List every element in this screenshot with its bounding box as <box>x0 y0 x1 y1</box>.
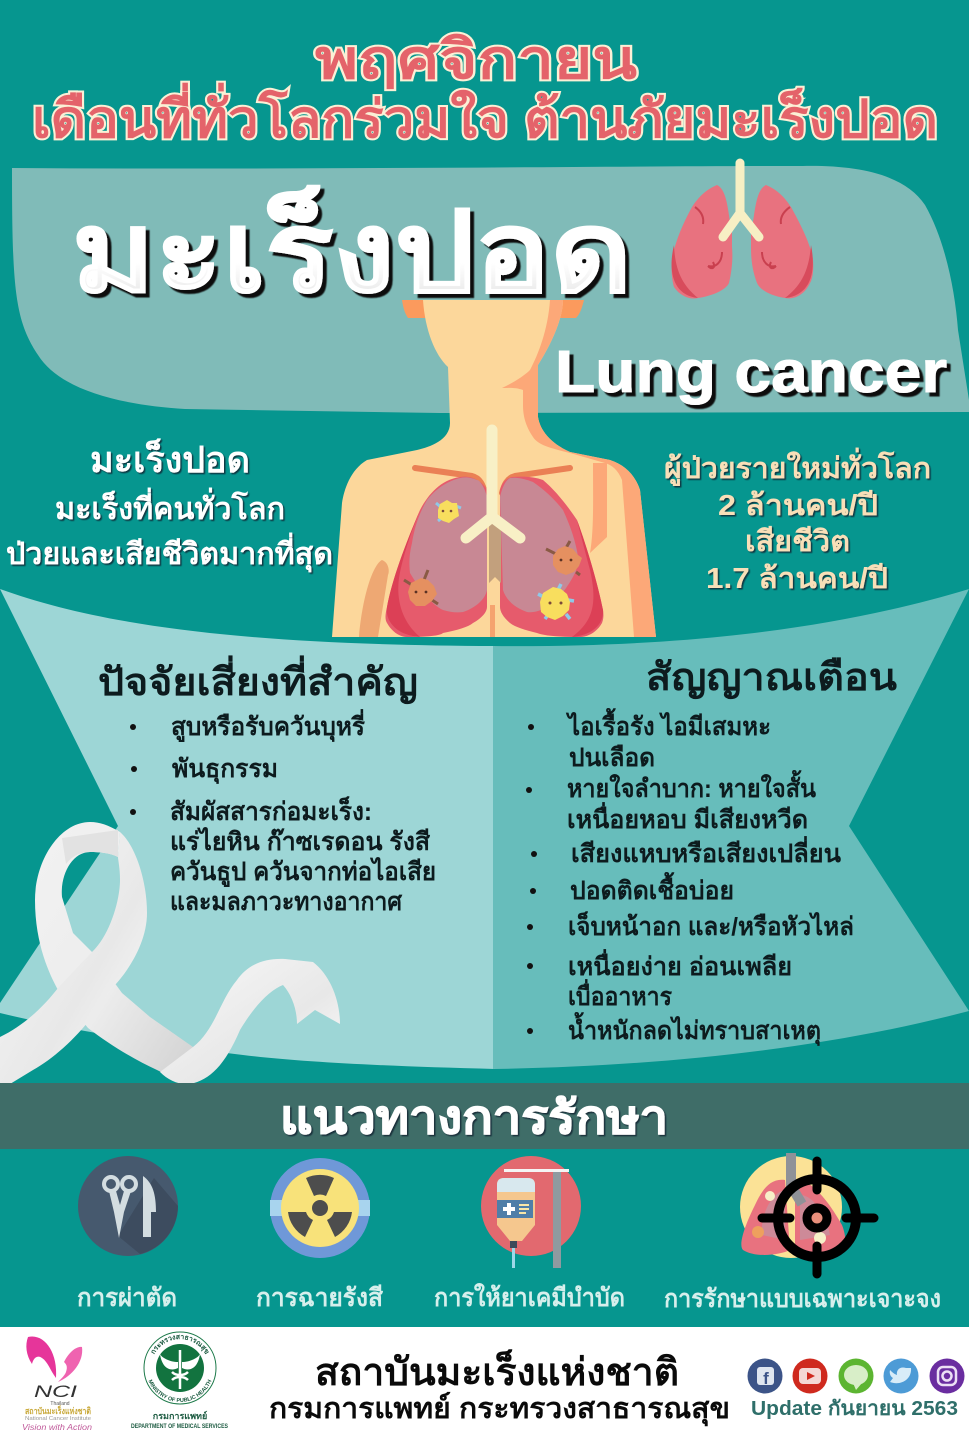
illustration: awareness ribbon <box>0 822 340 1085</box>
social media icons: f <box>763 1369 769 1388</box>
list: risk factors <box>130 709 436 916</box>
logo: National Cancer Institute: Thailand <box>50 1401 70 1407</box>
panel: footer <box>0 1327 969 1443</box>
logo: National Cancer Institute: Vision with Action <box>22 1423 93 1432</box>
list: warning signs: เบื่ออาหาร <box>568 979 673 1011</box>
icon: surgery <box>78 1156 178 1256</box>
panel: warning signs background <box>493 589 969 1069</box>
panel: risk factors background <box>0 589 495 1069</box>
text block: statistics: 1.7 ล้านคน/ปี <box>706 563 888 595</box>
icon: brown cancer cell left <box>404 570 438 606</box>
treatment labels: การฉายรังสี <box>256 1284 384 1312</box>
list: risk factors: สูบหรือรับควันบุหรี่ <box>171 709 366 743</box>
list: risk factors: และมลภาวะทางอากาศ <box>170 888 403 916</box>
logo: National Cancer Institute: สถาบันมะเร็งแห่งชาติ <box>25 1404 91 1416</box>
treatment labels: การรักษาแบบเฉพาะเจาะจง <box>664 1285 941 1313</box>
text block: lung cancer description: มะเร็งที่คนทั่วโลก <box>55 487 285 526</box>
logo: Department of Medical Services <box>131 1332 228 1430</box>
logo: National Cancer Institute: NCI <box>34 1382 77 1401</box>
treatment labels <box>77 1282 941 1313</box>
logo: Department of Medical Services: MINISTRY OF PUBLIC HEALTH <box>148 1379 212 1402</box>
social media icons <box>748 1358 964 1394</box>
list: warning signs: เหนื่อยหอบ มีเสียงหวีด <box>567 802 808 834</box>
footer institute name: กรมการแพทย์ กระทรวงสาธารณสุข <box>269 1391 730 1426</box>
logo: National Cancer Institute: National Cancer Institute <box>25 1416 91 1422</box>
title: เดือนที่ทั่วโลกร่วมใจ ต้านภัยมะเร็งปอด <box>32 83 938 149</box>
panel: treatment band <box>0 1083 969 1149</box>
list: warning signs <box>526 707 854 1047</box>
title: พฤศจิกายน <box>315 30 637 90</box>
heading: warning signs: สัญญาณเตือน <box>646 657 897 699</box>
lungs: inner mauve <box>409 477 578 612</box>
footer institute name <box>269 1349 730 1426</box>
heading: Lung cancer: Lung cancer <box>555 339 947 405</box>
treatment labels: การให้ยาเคมีบำบัด <box>434 1282 625 1312</box>
text block: lung cancer description: ป่วยและเสียชีวิตมากที่สุด <box>6 532 333 573</box>
illustration: human torso with lungs <box>332 300 656 637</box>
panel: title background shape <box>12 166 969 413</box>
icon: chemotherapy <box>481 1156 581 1268</box>
update date: Update กันยายน 2563 <box>751 1398 958 1420</box>
list: warning signs: น้ำหนักลดไม่ทราบสาเหตุ <box>568 1011 821 1047</box>
icon: lungs <box>672 163 813 299</box>
heading: treatment guidelines: แนวทางการรักษา <box>280 1091 668 1143</box>
list: warning signs: ไอเรื้อรัง ไอมีเสมหะ <box>565 707 771 741</box>
icon: yellow cancer cell upper <box>436 500 461 523</box>
list: warning signs: เสียงแหบหรือเสียงเปลี่ยน <box>571 836 841 868</box>
list: warning signs: เหนื่อยง่าย อ่อนเพลีย <box>568 949 792 981</box>
icon: brown cancer cell right <box>546 541 582 575</box>
list: warning signs: หายใจลำบาก: หายใจสั้น <box>567 769 816 803</box>
lungs: outer tissue <box>386 477 603 637</box>
heading: lung cancer Thai: มะเร็งปอด <box>72 185 632 315</box>
text block: statistics: ผู้ป่วยรายใหม่ทั่วโลก <box>664 447 931 486</box>
list: risk factors: แร่ไยหิน ก๊าซเรดอน รังสี <box>170 826 431 856</box>
icon: targeted therapy <box>740 1153 874 1274</box>
logo: National Cancer Institute <box>22 1336 93 1432</box>
list: risk factors: สัมผัสสารก่อมะเร็ง: <box>170 796 372 826</box>
list: warning signs: ปนเลือด <box>569 744 655 772</box>
logo: Department of Medical Services: กระทรวงสาธารณสุข <box>151 1334 209 1354</box>
logo: Department of Medical Services: DEPARTMENT OF MEDICAL SERVICES <box>131 1424 228 1430</box>
list: warning signs: เจ็บหน้าอก และ/หรือหัวไหล่ <box>568 911 854 941</box>
text block: lung cancer description: มะเร็งปอด <box>90 437 250 480</box>
treatment labels: การผ่าตัด <box>77 1284 177 1312</box>
footer institute name: สถาบันมะเร็งแห่งชาติ <box>315 1349 679 1394</box>
text block: statistics: เสียชีวิต <box>745 526 850 558</box>
list: risk factors: ควันธูป ควันจากท่อไอเสีย <box>170 856 436 888</box>
icon: radiation <box>270 1158 370 1258</box>
text block: statistics: 2 ล้านคน/ปี <box>718 490 878 522</box>
list: risk factors: พันธุกรรม <box>172 755 278 785</box>
list: warning signs: ปอดติดเชื้อบ่อย <box>570 871 734 905</box>
title <box>32 30 938 149</box>
text block: statistics <box>664 447 931 595</box>
heading: risk factors: ปัจจัยเสี่ยงที่สำคัญ <box>98 655 418 704</box>
text block: lung cancer description <box>6 437 333 573</box>
logo: Department of Medical Services: กรมการแพทย์ <box>153 1410 207 1421</box>
icon: yellow cancer cell lower <box>538 584 574 620</box>
